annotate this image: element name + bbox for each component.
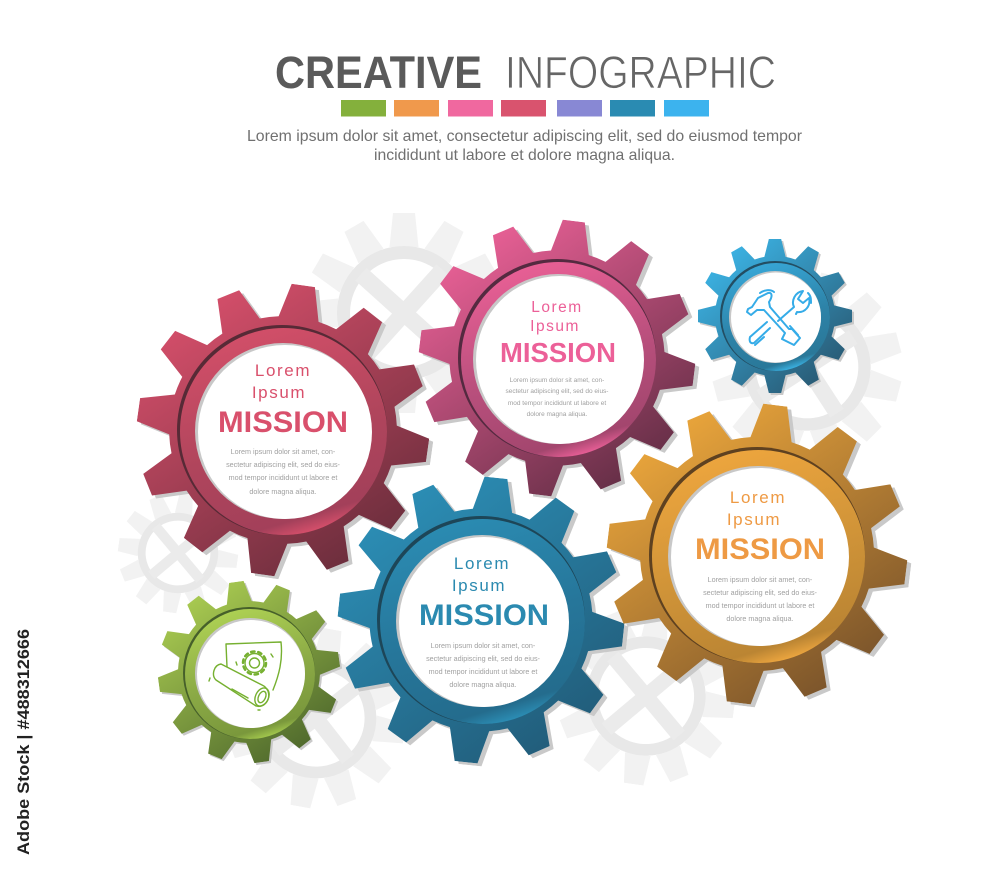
- text: orange MISSION: MISSION: [695, 533, 825, 566]
- text: blue Lorem Ipsum: [452, 554, 510, 595]
- text: blue body: mod tempor incididunt ut labore et: [429, 667, 537, 676]
- text: blue body: Lorem ipsum dolor sit amet, con-: [431, 641, 536, 650]
- colour swatch row: [341, 100, 709, 116]
- text: orange body: Lorem ipsum dolor sit amet, con-: [708, 575, 813, 584]
- text: red body: sectetur adipiscing elit, sed do eius-: [226, 460, 341, 469]
- text: pink body: mod tempor incididunt ut labore et: [508, 400, 606, 407]
- text: orange body: sectetur adipiscing elit, sed do eius-: [703, 588, 818, 597]
- text: red body: mod tempor incididunt ut labore et: [229, 473, 337, 482]
- title: INFOGRAPHIC: INFOGRAPHIC: [505, 47, 776, 98]
- text: red Lorem Ipsum: Ipsum: [252, 383, 306, 402]
- text: blue body: dolore magna aliqua.: [449, 680, 517, 689]
- text: orange body: dolore magna aliqua.: [726, 614, 794, 623]
- text: red body: Lorem ipsum dolor sit amet, con-: [231, 447, 336, 456]
- text: pink MISSION: MISSION: [500, 337, 616, 368]
- icon: blueprint roll: [209, 642, 282, 710]
- text: blue Lorem Ipsum: Lorem: [454, 554, 510, 573]
- text: blue body: [426, 641, 541, 689]
- text: orange body: [703, 575, 818, 623]
- text: pink Lorem Ipsum: Ipsum: [530, 318, 580, 335]
- gear: cyan with tools icon: [697, 238, 855, 396]
- text: pink body: sectetur adipiscing elit, sed do eius-: [506, 388, 608, 395]
- text: red MISSION: MISSION: [218, 406, 348, 439]
- text: pink body: dolore magna aliqua.: [527, 411, 588, 418]
- subtitle: [247, 128, 803, 164]
- text: blue body: sectetur adipiscing elit, sed do eius-: [426, 654, 541, 663]
- icon: hammer and wrench: [747, 290, 811, 345]
- gear: blue mission: [322, 461, 644, 782]
- title: [275, 47, 776, 98]
- text: pink Lorem Ipsum: [530, 299, 583, 335]
- text: red Lorem Ipsum: Lorem: [255, 361, 311, 380]
- text: pink body: Lorem ipsum dolor sit amet, con-: [510, 377, 604, 384]
- text: red body: [226, 447, 341, 496]
- gear: orange mission: [588, 385, 930, 726]
- text: blue Lorem Ipsum: Ipsum: [452, 576, 506, 595]
- text: orange Lorem Ipsum: Lorem: [730, 488, 786, 507]
- text: orange Lorem Ipsum: [727, 488, 786, 529]
- text: red Lorem Ipsum: [252, 361, 311, 402]
- stock watermark id: Adobe Stock | #488312666: [15, 629, 33, 855]
- gear: red mission: [116, 263, 454, 600]
- subtitle: incididunt ut labore et dolore magna aliqua.: [374, 147, 675, 164]
- text: red body: dolore magna aliqua.: [249, 487, 317, 496]
- text: pink body: [506, 377, 608, 418]
- text: pink Lorem Ipsum: Lorem: [531, 299, 583, 316]
- text: orange body: mod tempor incididunt ut labore et: [706, 601, 814, 610]
- text: orange Lorem Ipsum: Ipsum: [727, 510, 781, 529]
- background grey gears: [110, 212, 925, 823]
- gear: green with roll icon: [145, 568, 355, 778]
- text: blue MISSION: MISSION: [419, 599, 549, 632]
- title: CREATIVE: CREATIVE: [275, 47, 482, 98]
- subtitle: Lorem ipsum dolor sit amet, consectetur adipiscing elit, sed do eiusmod tempor: [247, 128, 803, 145]
- gear: pink mission: [402, 203, 716, 516]
